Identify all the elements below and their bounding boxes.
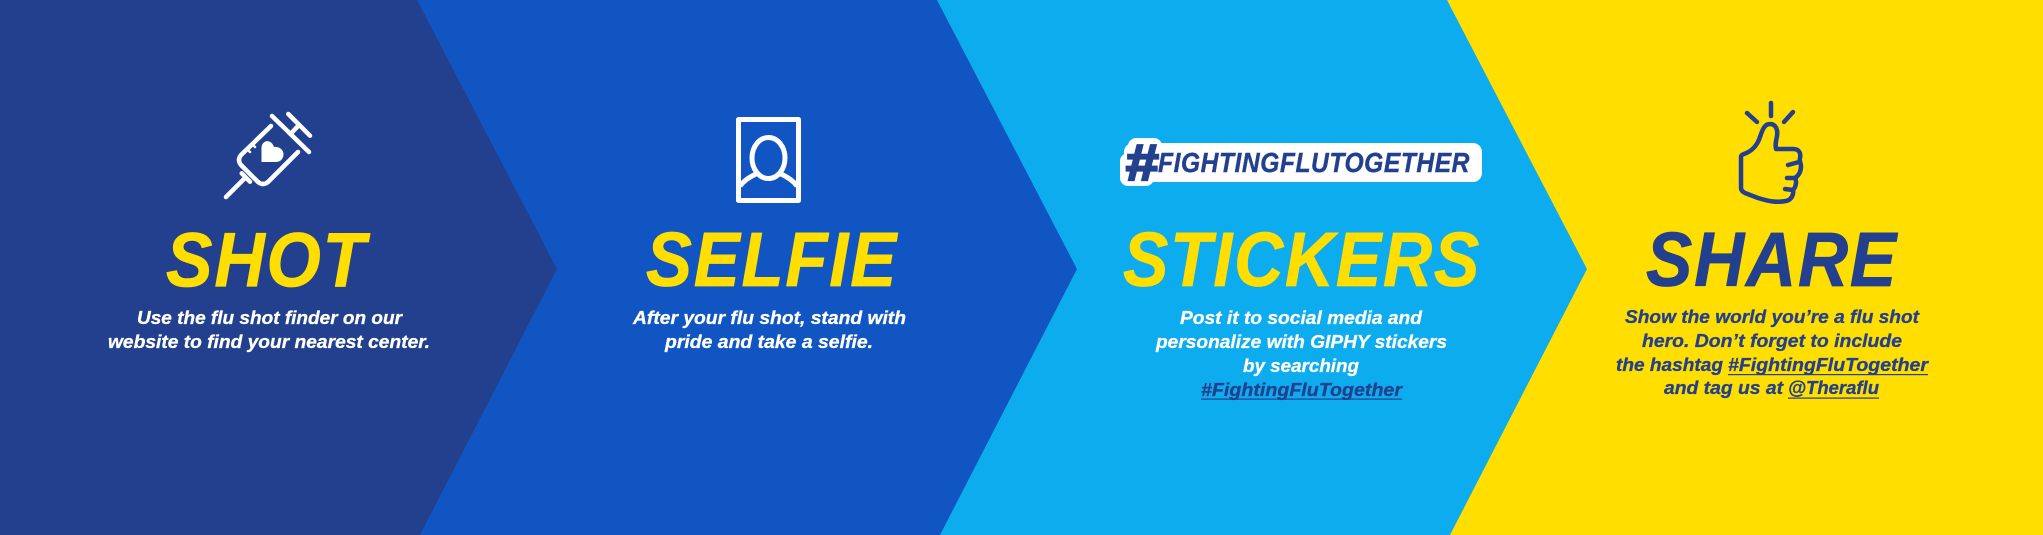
text: stickers description: Post it to social media and xyxy=(1180,308,1423,328)
icon: hashtag sticker xyxy=(1120,134,1482,191)
text: share description: #FightingFluTogether xyxy=(1728,355,1929,375)
heading: STICKERS: STICKERS xyxy=(1123,217,1481,303)
heading: SHARE: SHARE xyxy=(1646,217,1899,303)
icon: hashtag sticker: # xyxy=(1125,134,1159,191)
text: share description: Show the world you’re a flu shot xyxy=(1625,307,1920,327)
text: stickers description: personalize with GIPHY stickers xyxy=(1155,332,1447,352)
text: selfie description: pride and take a selfie. xyxy=(664,332,873,352)
text: selfie description: After your flu shot, stand with xyxy=(632,308,906,328)
text: share description: the hashtag xyxy=(1616,355,1723,375)
text: shot description: Use the flu shot finder on our xyxy=(137,308,403,328)
icon: thumbs up xyxy=(1741,103,1801,202)
text: share description: @Theraflu xyxy=(1788,378,1879,398)
text: share description xyxy=(1616,307,1929,399)
text: share description: and tag us at xyxy=(1664,378,1784,398)
heading: SHOT: SHOT xyxy=(166,218,371,304)
text: shot description xyxy=(108,308,430,352)
text: stickers description: by searching xyxy=(1243,356,1359,376)
icon: hashtag sticker: FIGHTINGFLUTOGETHER xyxy=(1158,147,1470,178)
icon: syringe with heart xyxy=(226,114,310,197)
text: stickers description xyxy=(1155,308,1447,400)
text: share description: hero. Don’t forget to include xyxy=(1642,331,1902,351)
heading: SELFIE: SELFIE xyxy=(646,217,899,303)
text: stickers description: #FightingFluTogether xyxy=(1201,380,1403,400)
panel: stickers background xyxy=(0,0,1587,535)
text: shot description: website to find your nearest center. xyxy=(108,332,430,352)
panel: selfie background xyxy=(0,0,1077,535)
text: selfie description xyxy=(632,308,906,352)
panel: shot background xyxy=(0,0,557,535)
icon: selfie portrait xyxy=(738,120,798,200)
